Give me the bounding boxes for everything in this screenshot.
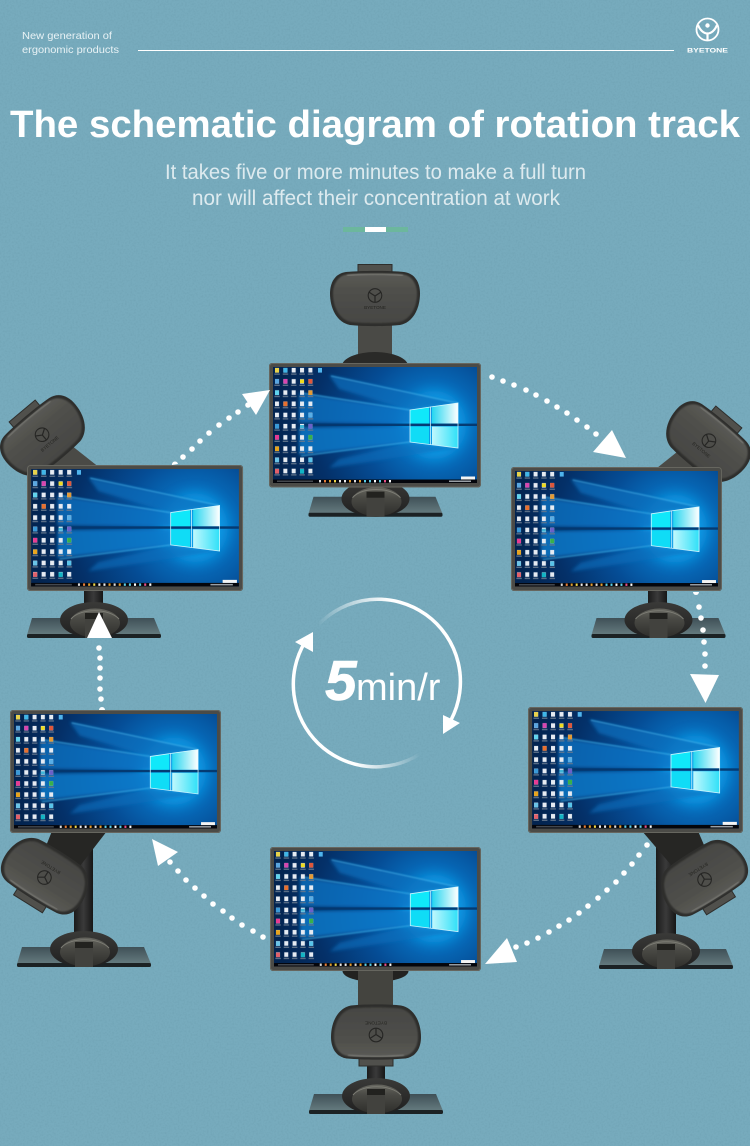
accent bar <box>343 227 408 232</box>
monitor: upper-left position <box>0 382 243 638</box>
monitor: upper-left position: BYETONE <box>40 435 60 453</box>
logo: Byetone <box>687 18 728 54</box>
monitor: lower-left position: BYETONE <box>40 859 61 875</box>
logo: Byetone: BYETONE <box>687 48 728 54</box>
header tagline: ergonomic products <box>22 44 119 56</box>
arrow: lower-right to bottom <box>485 842 650 964</box>
header rule <box>138 50 674 51</box>
subtitle: It takes five or more minutes to make a full turn <box>165 161 586 184</box>
arrow: upper-right to lower-right <box>690 592 719 703</box>
arrow: top to upper-right <box>489 374 626 458</box>
monitor: lower-right position: BYETONE <box>688 861 709 877</box>
monitor: top position: BYETONE <box>364 305 386 310</box>
title: The schematic diagram of rotation track <box>10 104 741 146</box>
rotation speed label: 5 <box>325 649 358 713</box>
monitor: bottom position <box>270 847 481 1114</box>
monitor: lower-left position <box>0 710 221 967</box>
header tagline: New generation of <box>22 30 112 42</box>
monitor: upper-right position <box>511 388 750 638</box>
circular arrow: clockwise lower arc <box>293 632 420 767</box>
monitor: lower-right position <box>528 707 750 969</box>
arrow: upper-left to top <box>172 390 270 465</box>
arrow: lower-left to upper-left <box>87 612 112 710</box>
arrow: bottom to lower-left <box>152 839 266 940</box>
subtitle: nor will affect their concentration at work <box>192 187 560 210</box>
monitor: top position <box>269 264 481 517</box>
circular arrow: clockwise upper arc <box>318 599 460 734</box>
center rotation badge <box>293 599 460 767</box>
monitor: bottom position: BYETONE <box>365 1020 387 1026</box>
monitor: upper-right position: BYETONE <box>691 441 711 459</box>
rotation speed label: min/r <box>356 667 441 709</box>
